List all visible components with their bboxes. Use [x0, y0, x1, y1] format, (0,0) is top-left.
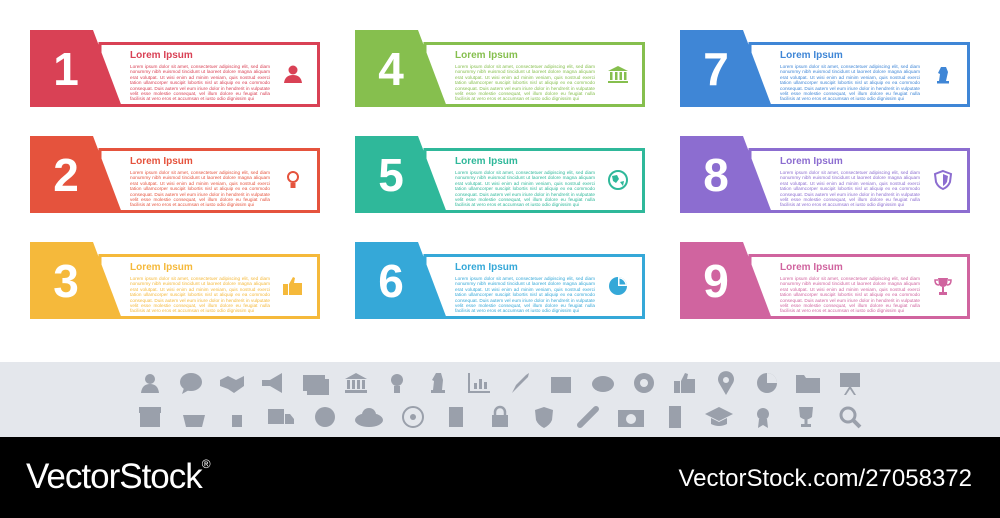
card 7: 7: [703, 43, 729, 95]
card 3: Lorem ipsum dolor sit amet, consectetuer adipiscing elit, sed diam nonummy nibh euismod tincidunt ut laoreet dolore magna aliquam erat volutpat. Ut wisi enim ad minim veniam, quis nostrud exerci tation ullamcorper suscipit lobortis nisl ut aliquip ex ea commodo consequat. Duis autem vel eum iriure dolor in hendrerit in vulputate velit esse molestie consequat, vel illum dolore eu feugiat nulla facilisis at vero eros et accumsan et iusto odio dignissim qui: [130, 276, 270, 313]
card 2: 2: [53, 149, 79, 201]
card 2: Lorem Ipsum: [130, 156, 193, 167]
icon row 1: [141, 371, 860, 395]
card 1: Lorem ipsum dolor sit amet, consectetuer adipiscing elit, sed diam nonummy nibh euismod tincidunt ut laoreet dolore magna aliquam erat volutpat. Ut wisi enim ad minim veniam, quis nostrud exerci tation ullamcorper suscipit lobortis nisl ut aliquip ex ea commodo consequat. Duis autem vel eum iriure dolor in hendrerit in vulputate velit esse molestie consequat, vel illum dolore eu feugiat nulla facilisis at vero eros et accumsan et iusto odio dignissim qui: [130, 64, 270, 101]
footer logo text: VectorStock®: [26, 457, 210, 496]
card 2: Lorem ipsum dolor sit amet, consectetuer adipiscing elit, sed diam nonummy nibh euismod tincidunt ut laoreet dolore magna aliquam erat volutpat. Ut wisi enim ad minim veniam, quis nostrud exerci tation ullamcorper suscipit lobortis nisl ut aliquip ex ea commodo consequat. Duis autem vel eum iriure dolor in hendrerit in vulputate velit esse molestie consequat, vel illum dolore eu feugiat nulla facilisis at vero eros et accumsan et iusto odio dignissim qui: [130, 170, 270, 207]
card 1: 1: [53, 43, 79, 95]
card 6: Lorem ipsum dolor sit amet, consectetuer adipiscing elit, sed diam nonummy nibh euismod tincidunt ut laoreet dolore magna aliquam erat volutpat. Ut wisi enim ad minim veniam, quis nostrud exerci tation ullamcorper suscipit lobortis nisl ut aliquip ex ea commodo consequat. Duis autem vel eum iriure dolor in hendrerit in vulputate velit esse molestie consequat, vel illum dolore eu feugiat nulla facilisis at vero eros et accumsan et iusto odio dignissim qui: [455, 276, 595, 313]
card 1: Lorem Ipsum: [130, 50, 193, 61]
icon: pie chart: [609, 277, 627, 295]
card 4: 4: [378, 43, 404, 95]
card 7: [680, 30, 970, 107]
card 5: Lorem Ipsum: [455, 156, 518, 167]
card 3: Lorem Ipsum: [130, 262, 193, 273]
icon: globe: [608, 170, 628, 190]
icon: bulb: [287, 171, 299, 188]
card 9: 9: [703, 255, 729, 307]
card 8: 8: [703, 149, 729, 201]
card 7: Lorem ipsum dolor sit amet, consectetuer adipiscing elit, sed diam nonummy nibh euismod tincidunt ut laoreet dolore magna aliquam erat volutpat. Ut wisi enim ad minim veniam, quis nostrud exerci tation ullamcorper suscipit lobortis nisl ut aliquip ex ea commodo consequat. Duis autem vel eum iriure dolor in hendrerit in vulputate velit esse molestie consequat, vel illum dolore eu feugiat nulla facilisis at vero eros et accumsan et iusto odio dignissim qui: [780, 64, 920, 101]
card 5: [355, 136, 645, 213]
card 9: [680, 242, 970, 319]
card 5: 5: [378, 149, 404, 201]
card 4: Lorem Ipsum: [455, 50, 518, 61]
footer: [0, 437, 1000, 518]
icon: shield: [934, 170, 952, 190]
icon band: [0, 362, 1000, 437]
card 9: Lorem ipsum dolor sit amet, consectetuer adipiscing elit, sed diam nonummy nibh euismod tincidunt ut laoreet dolore magna aliquam erat volutpat. Ut wisi enim ad minim veniam, quis nostrud exerci tation ullamcorper suscipit lobortis nisl ut aliquip ex ea commodo consequat. Duis autem vel eum iriure dolor in hendrerit in vulputate velit esse molestie consequat, vel illum dolore eu feugiat nulla facilisis at vero eros et accumsan et iusto odio dignissim qui: [780, 276, 920, 313]
card 7: Lorem Ipsum: [780, 50, 843, 61]
card 8: Lorem Ipsum: [780, 156, 843, 167]
icon row 2: [139, 406, 860, 428]
card 2: [30, 136, 320, 213]
icon: trophy: [934, 278, 952, 295]
card 9: Lorem Ipsum: [780, 262, 843, 273]
icon: bank: [608, 66, 628, 83]
icon: chess knight: [937, 67, 949, 84]
card 5: Lorem ipsum dolor sit amet, consectetuer adipiscing elit, sed diam nonummy nibh euismod tincidunt ut laoreet dolore magna aliquam erat volutpat. Ut wisi enim ad minim veniam, quis nostrud exerci tation ullamcorper suscipit lobortis nisl ut aliquip ex ea commodo consequat. Duis autem vel eum iriure dolor in hendrerit in vulputate velit esse molestie consequat, vel illum dolore eu feugiat nulla facilisis at vero eros et accumsan et iusto odio dignissim qui: [455, 170, 595, 207]
icon: person: [284, 66, 302, 83]
card 1: [30, 30, 320, 107]
card 8: Lorem ipsum dolor sit amet, consectetuer adipiscing elit, sed diam nonummy nibh euismod tincidunt ut laoreet dolore magna aliquam erat volutpat. Ut wisi enim ad minim veniam, quis nostrud exerci tation ullamcorper suscipit lobortis nisl ut aliquip ex ea commodo consequat. Duis autem vel eum iriure dolor in hendrerit in vulputate velit esse molestie consequat, vel illum dolore eu feugiat nulla facilisis at vero eros et accumsan et iusto odio dignissim qui: [780, 170, 920, 207]
footer url: VectorStock.com/27058372: [678, 465, 972, 492]
card 4: Lorem ipsum dolor sit amet, consectetuer adipiscing elit, sed diam nonummy nibh euismod tincidunt ut laoreet dolore magna aliquam erat volutpat. Ut wisi enim ad minim veniam, quis nostrud exerci tation ullamcorper suscipit lobortis nisl ut aliquip ex ea commodo consequat. Duis autem vel eum iriure dolor in hendrerit in vulputate velit esse molestie consequat, vel illum dolore eu feugiat nulla facilisis at vero eros et accumsan et iusto odio dignissim qui: [455, 64, 595, 101]
card 6: Lorem Ipsum: [455, 262, 518, 273]
card 8: [680, 136, 970, 213]
card 3: [30, 242, 320, 319]
card 6: 6: [378, 255, 404, 307]
card 6: [355, 242, 645, 319]
icon: thumbs up: [283, 277, 302, 295]
card 3: 3: [53, 255, 79, 307]
card 4: [355, 30, 645, 107]
